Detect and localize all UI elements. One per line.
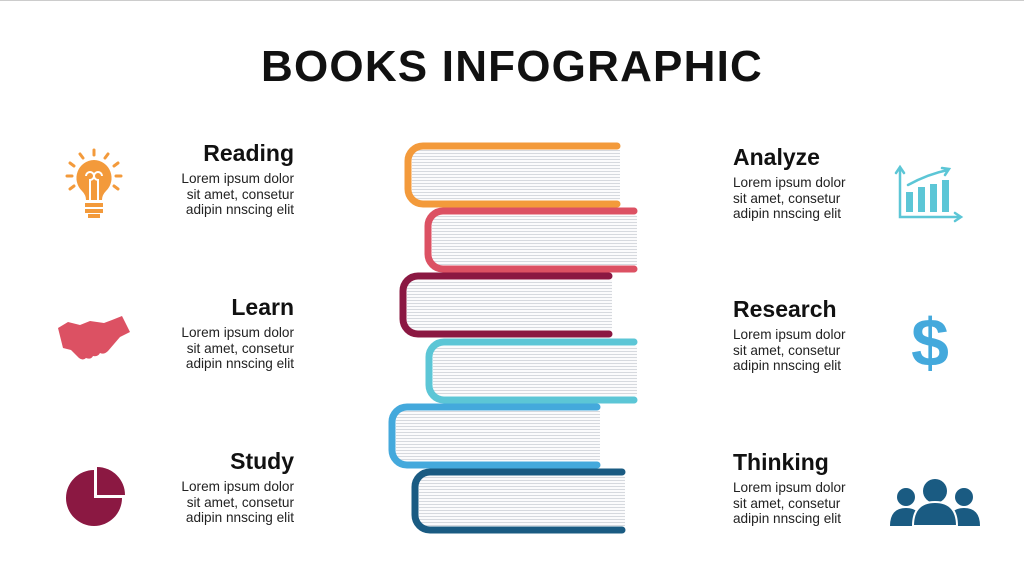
icon: light bulb [67,150,121,218]
text: Reading: Reading [203,140,294,166]
icon: handshake [58,316,130,360]
text: Analyze: Analyze [733,144,820,170]
book maroon [403,276,612,334]
text: Learn: adipin nnscing elit [186,356,294,371]
text: Research [733,296,846,373]
text: Thinking: sit amet, consetur [733,496,840,510]
text: Analyze [733,144,846,221]
icon: dollar: $ [911,305,949,381]
text: Study: sit amet, consetur [187,494,294,510]
book blue [392,407,600,465]
text: Learn: sit amet, consetur [187,340,294,356]
text: Research: Research [733,296,837,322]
book stack [392,146,637,530]
text: Study: adipin nnscing elit [186,510,294,525]
text: Study: Lorem ipsum dolor [181,479,294,494]
text: Analyze: sit amet, consetur [733,190,840,206]
text: Thinking: adipin nnscing elit [733,511,841,526]
text: Research: Lorem ipsum dolor [733,327,846,342]
icon: people [890,479,980,526]
text: Study: Study [230,448,294,474]
text: Reading [181,140,294,217]
text: Reading: adipin nnscing elit [186,202,294,217]
icon: pie chart [66,467,125,526]
text: Research: sit amet, consetur [733,342,840,358]
text: Thinking [733,449,846,526]
text: Learn: Lorem ipsum dolor [181,325,294,340]
text: Learn [181,294,294,371]
book navy [415,472,625,530]
book cyan [429,342,637,400]
text: Study [181,448,294,525]
book orange [408,146,620,204]
icon: bar chart [896,167,961,221]
text: Thinking: Lorem ipsum dolor [733,480,846,495]
text: Analyze: Lorem ipsum dolor [733,175,846,190]
book red [428,211,637,269]
text: Analyze: adipin nnscing elit [733,206,841,221]
text: Reading: sit amet, consetur [187,186,294,202]
text: Reading: Lorem ipsum dolor [181,171,294,186]
text: Learn: Learn [231,294,294,320]
text: Thinking: Thinking [733,449,829,475]
title: BOOKS INFOGRAPHIC [261,42,763,91]
text: Research: adipin nnscing elit [733,358,841,373]
